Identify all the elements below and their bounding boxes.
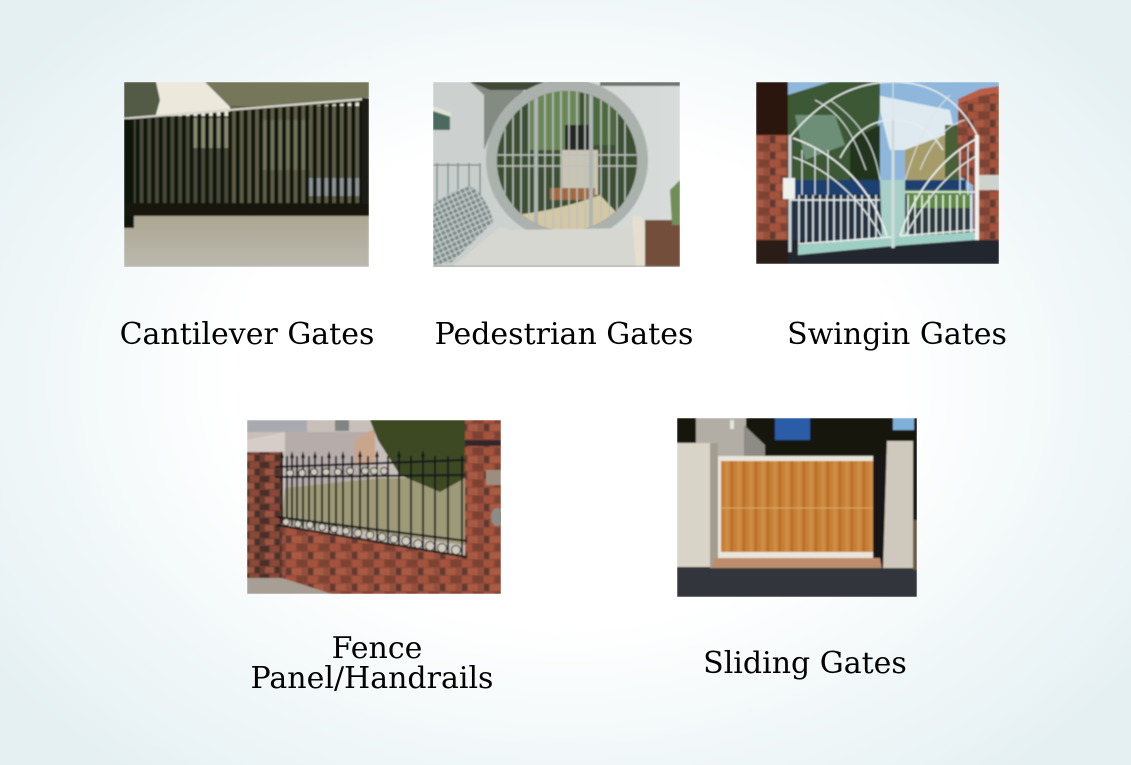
label: Pedestrian Gates	[435, 317, 693, 352]
photo: black cantilever gate	[124, 82, 369, 267]
label: Swingin Gates	[787, 317, 1007, 352]
panel: Swingin Gates	[756, 82, 1007, 352]
label	[251, 631, 493, 696]
panel: Cantilever Gates	[120, 82, 374, 352]
label: Panel/Handrails	[251, 661, 493, 696]
panel: Sliding Gates	[677, 418, 917, 681]
label: Cantilever Gates	[120, 317, 374, 352]
panel: Pedestrian Gates	[433, 79, 693, 352]
photo: timber sliding gate	[677, 418, 917, 597]
photo: iron fence on brick wall	[247, 420, 503, 594]
label: Fence	[332, 631, 422, 666]
photo: swing gate with fan arcs	[756, 82, 999, 264]
gate types infographic	[121, 82, 1006, 691]
label: Sliding Gates	[703, 646, 907, 681]
photo: moon gate	[433, 79, 680, 267]
panel: Fence Panel/Handrails	[247, 420, 503, 696]
